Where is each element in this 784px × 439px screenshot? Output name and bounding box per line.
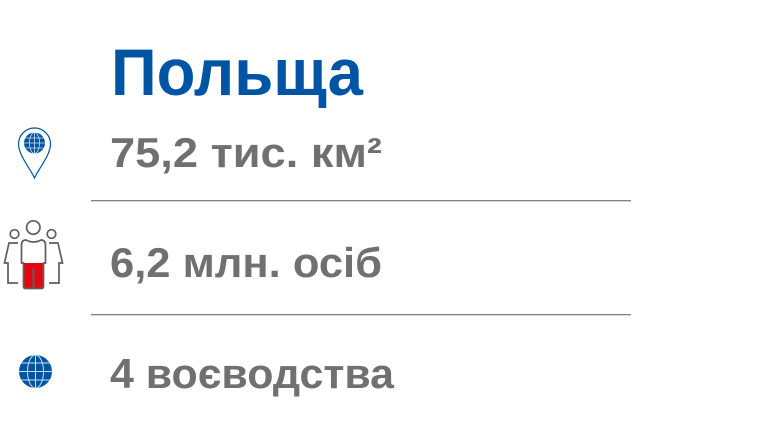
divider bbox=[91, 314, 631, 315]
icon: globe bbox=[19, 355, 52, 388]
icon: people with red fill bbox=[4, 221, 62, 288]
divider bbox=[91, 200, 631, 201]
text: voivodeships: 4 воєводства bbox=[110, 350, 395, 397]
text: population: 6,2 млн. осіб bbox=[110, 239, 382, 286]
text: area: 75,2 тис. км² bbox=[110, 129, 382, 176]
icon: map pin with globe bbox=[18, 128, 50, 178]
title: Польща bbox=[111, 35, 364, 109]
